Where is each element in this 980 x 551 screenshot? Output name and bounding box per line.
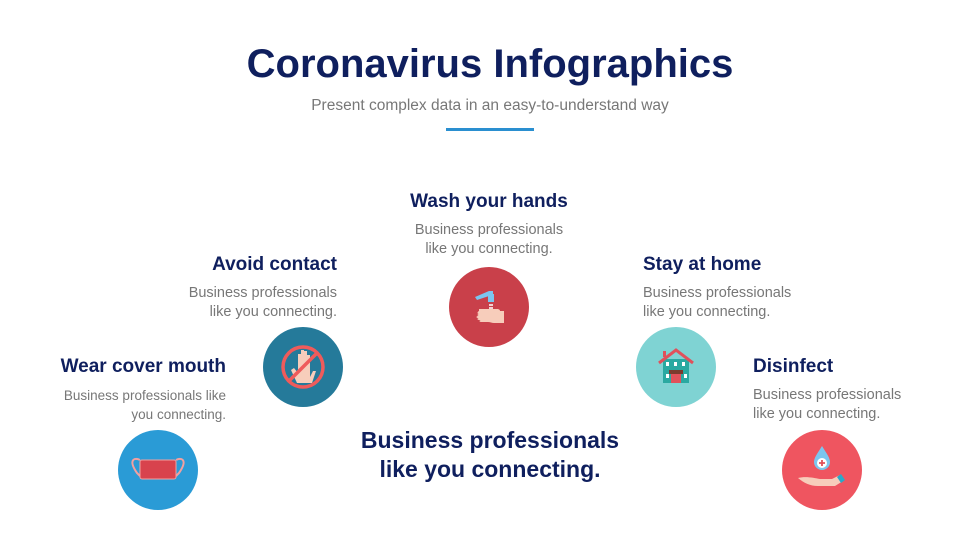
icon: avoid contact xyxy=(263,327,343,407)
text: wash: Business professionals xyxy=(415,222,563,238)
icon: disinfect xyxy=(782,430,862,510)
heading: wash your hands: Wash your hands xyxy=(410,191,568,212)
text: mask: Business professionals like xyxy=(64,388,226,403)
text: stay: like you connecting. xyxy=(643,304,770,320)
text: stay: Business professionals xyxy=(643,285,791,301)
text: mask xyxy=(64,388,226,422)
text: mask: you connecting. xyxy=(131,407,226,422)
heading: stay at home: Stay at home xyxy=(643,254,761,275)
text: avoid xyxy=(189,285,337,320)
center statement xyxy=(361,427,619,482)
icon: mask xyxy=(118,430,198,510)
title: Coronavirus Infographics xyxy=(247,42,733,86)
heading: disinfect: Disinfect xyxy=(753,356,833,377)
text: disinfect: Business professionals xyxy=(753,387,901,403)
text: avoid: Business professionals xyxy=(189,285,337,301)
icon: house xyxy=(636,327,716,407)
text: avoid: like you connecting. xyxy=(210,304,337,320)
subtitle: Present complex data in an easy-to-understand way xyxy=(311,97,669,114)
icon: wash hands xyxy=(449,267,529,347)
center statement: like you connecting. xyxy=(379,456,601,482)
text: disinfect xyxy=(753,387,901,422)
heading: avoid contact: Avoid contact xyxy=(212,254,337,275)
text: wash xyxy=(415,222,563,257)
text: disinfect: like you connecting. xyxy=(753,406,880,422)
text: stay xyxy=(643,285,791,320)
center statement: Business professionals xyxy=(361,427,619,453)
title underline xyxy=(446,128,534,131)
heading: wear cover mouth: Wear cover mouth xyxy=(61,356,226,377)
text: wash: like you connecting. xyxy=(425,241,553,257)
